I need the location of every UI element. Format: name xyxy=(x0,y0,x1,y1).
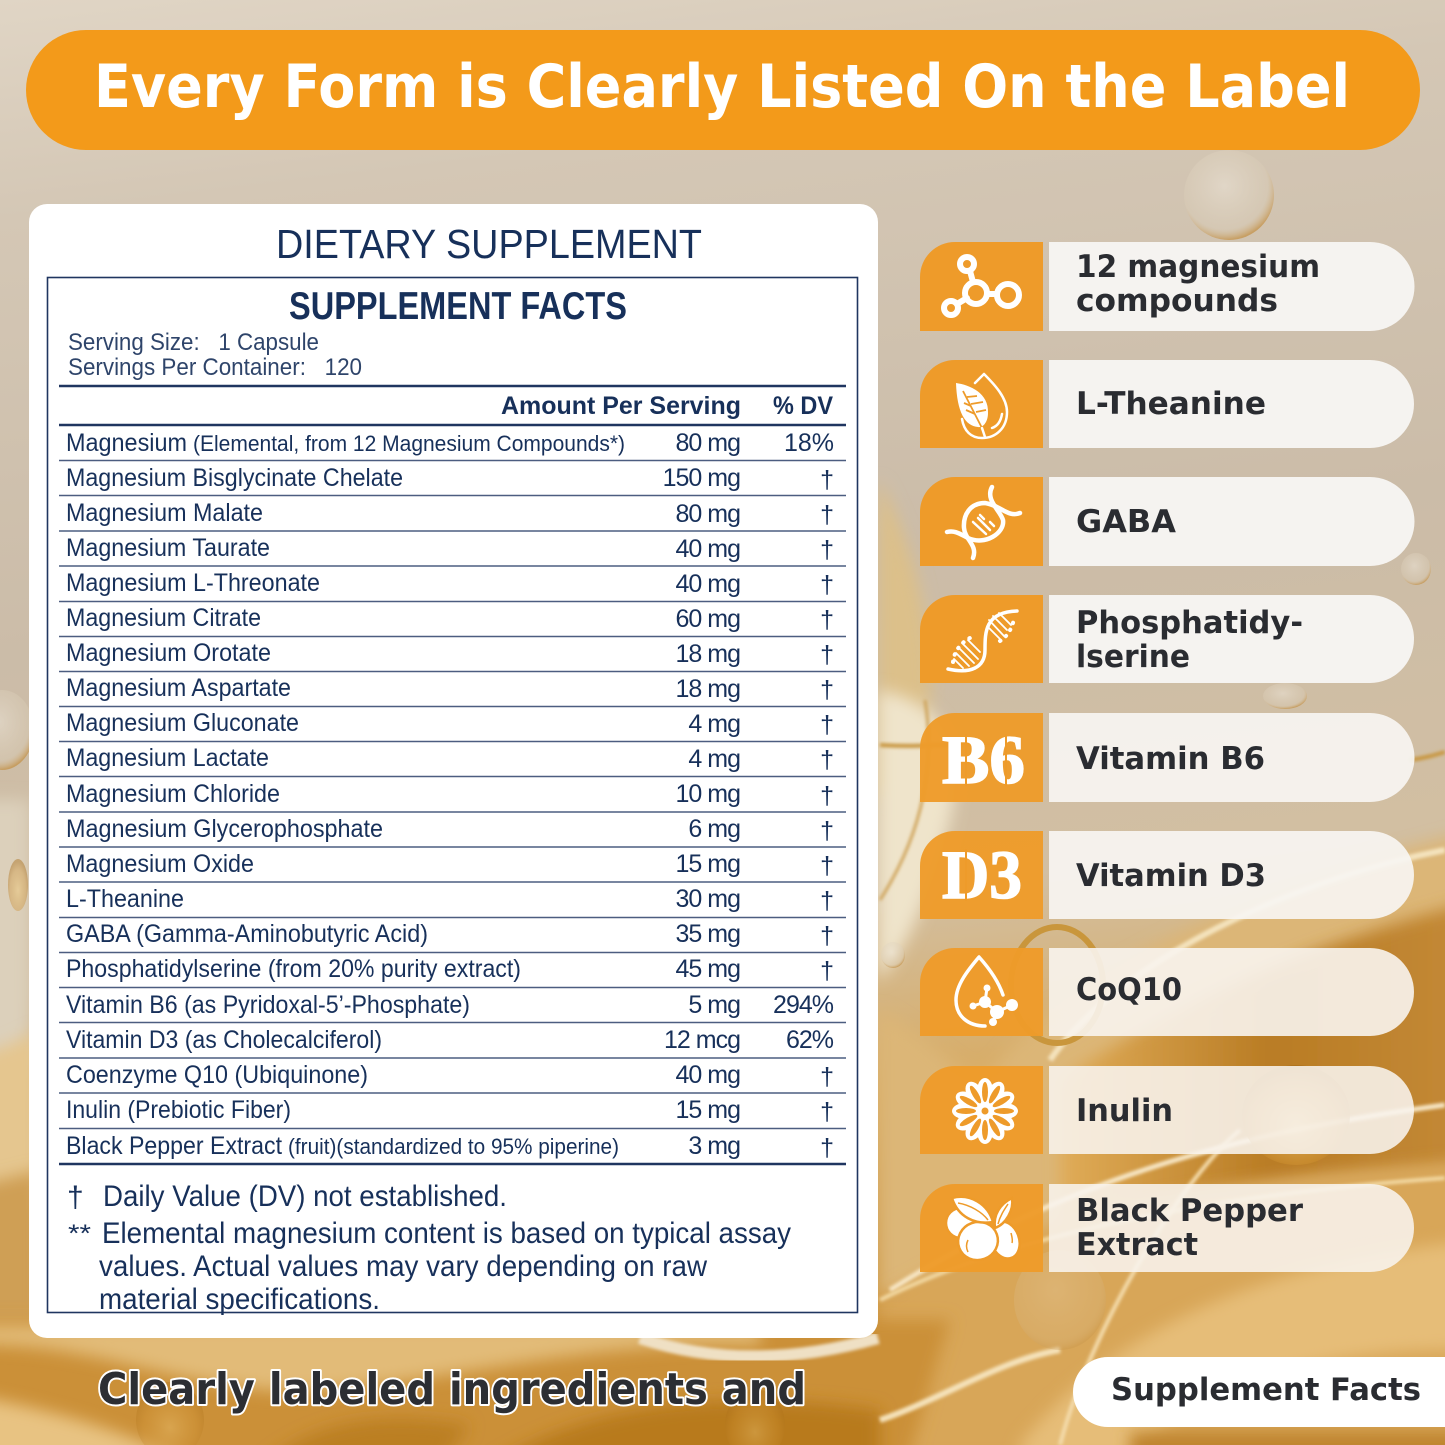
icon: pepper berries xyxy=(946,1197,1025,1266)
panel: supplement label card xyxy=(29,204,878,1338)
ingredient table rows: Coenzyme Q10 (Ubiquinone) xyxy=(66,1061,368,1089)
ingredient table rows: 30 mg xyxy=(676,885,740,913)
ingredient table rows: 294% xyxy=(773,991,834,1019)
ingredient table rows: 40 mg xyxy=(676,1061,740,1089)
item: 12 magnesium compounds: compounds xyxy=(1076,283,1278,319)
footnotes: Elemental magnesium content is based on typical assay xyxy=(102,1217,791,1250)
ingredient table rows: † xyxy=(820,466,834,494)
footnotes: Daily Value (DV) not established. xyxy=(103,1180,507,1213)
ingredient table rows: 15 mg xyxy=(676,850,740,878)
ingredient table rows: Magnesium xyxy=(66,429,187,457)
ingredient table rows: † xyxy=(820,1063,834,1091)
ingredient table rows: † xyxy=(820,1098,834,1126)
ingredient table rows: Magnesium L-Threonate xyxy=(66,569,320,597)
ingredient table rows: 60 mg xyxy=(676,605,740,633)
item: 12 magnesium compounds: 12 magnesium xyxy=(1076,249,1320,285)
ingredient table rows: Magnesium Oxide xyxy=(66,850,254,878)
ingredient table rows: Magnesium Aspartate xyxy=(66,674,291,702)
item: Inulin: Inulin xyxy=(1076,1093,1173,1129)
ingredient table rows: 18 mg xyxy=(676,675,740,703)
ingredient table rows: † xyxy=(820,746,834,774)
icon: flower xyxy=(952,1078,1018,1144)
ingredient table rows: (fruit)(standardized to 95% piperine) xyxy=(288,1134,619,1159)
ingredient table rows: L-Theanine xyxy=(66,885,184,913)
ingredient table rows: Magnesium Taurate xyxy=(66,534,270,562)
ingredient table rows: † xyxy=(820,571,834,599)
table header: % DV xyxy=(773,392,833,420)
item: Phosphatidylserine xyxy=(920,595,1414,683)
ingredient table rows: Magnesium Lactate xyxy=(66,744,269,772)
footnotes: material specifications. xyxy=(99,1283,380,1316)
icon: DNA cross xyxy=(947,487,1020,558)
item: Black Pepper Extract: Black Pepper xyxy=(1076,1193,1304,1229)
item: Phosphatidylserine: Phosphatidy- xyxy=(1076,605,1303,641)
ingredient table rows: 80 mg xyxy=(676,429,740,457)
footnotes xyxy=(67,1180,791,1316)
ingredient table rows: Phosphatidylserine (from 20% purity extract) xyxy=(66,955,521,983)
ingredient table rows: 4 mg xyxy=(688,710,740,738)
ingredient table rows: † xyxy=(820,606,834,634)
icon: DNA helix xyxy=(948,611,1017,671)
ingredient table rows: 18% xyxy=(784,429,834,457)
facts box border xyxy=(48,278,858,1312)
ingredient table rows: Magnesium Glycerophosphate xyxy=(66,815,383,843)
ingredient table rows: Magnesium Chloride xyxy=(66,780,280,808)
ingredient table rows: 45 mg xyxy=(676,955,740,983)
icon: B6 stencil: B6 xyxy=(942,722,1025,798)
bottom waves xyxy=(0,1320,950,1445)
ingredient table rows: 15 mg xyxy=(676,1096,740,1124)
caption: clearly labeled ingredients: Clearly labeled ingredients and xyxy=(98,1364,806,1415)
icon: drop with molecule xyxy=(956,957,1018,1026)
serving information: Serving Size: 1 Capsule xyxy=(68,329,319,356)
ingredient table rows: † xyxy=(820,817,834,845)
item: Black Pepper Extract: Extract xyxy=(1076,1227,1198,1263)
ingredient table rows: † xyxy=(820,922,834,950)
ingredient table rows: Magnesium Bisglycinate Chelate xyxy=(66,464,403,492)
lens at right of card xyxy=(878,480,931,800)
ingredient table rows: † xyxy=(820,782,834,810)
left edge xyxy=(0,800,30,1090)
title banner xyxy=(26,30,1420,150)
ingredient table rows: † xyxy=(820,676,834,704)
footnotes: † xyxy=(67,1181,84,1214)
light streaks xyxy=(880,744,1445,760)
ingredient table rows: † xyxy=(820,1134,834,1162)
ingredient table rows: 35 mg xyxy=(676,920,740,948)
right sweeping gold xyxy=(878,830,1445,1300)
ingredient table rows: Magnesium Malate xyxy=(66,499,263,527)
ingredient table rows: 150 mg xyxy=(663,464,740,492)
ingredient table rows: Vitamin D3 (as Cholecalciferol) xyxy=(66,1026,382,1054)
ingredient table rows: GABA (Gamma-Aminobutyric Acid) xyxy=(66,920,428,948)
ingredient table rows: 5 mg xyxy=(688,991,740,1019)
item: 12 magnesium compounds xyxy=(920,242,1414,331)
item: L-Theanine xyxy=(920,360,1414,448)
item: Vitamin B6 xyxy=(920,713,1414,802)
bubbles xyxy=(1184,150,1274,240)
item: Inulin xyxy=(920,1066,1414,1154)
serving information: Servings Per Container: 120 xyxy=(68,354,362,381)
item: Black Pepper Extract xyxy=(920,1184,1414,1272)
item: GABA xyxy=(920,477,1414,566)
ingredient table rows: Magnesium Citrate xyxy=(66,604,261,632)
badge: supplement facts: Supplement Facts xyxy=(1111,1372,1421,1408)
ingredient table rows: 62% xyxy=(786,1026,834,1054)
ingredient table rows: † xyxy=(820,501,834,529)
icon: leaf in drop xyxy=(956,374,1007,438)
ingredient table rows: 12 mcg xyxy=(664,1026,740,1054)
ingredient table rows: 10 mg xyxy=(676,780,740,808)
ingredient table rows: † xyxy=(820,852,834,880)
ingredient table rows: † xyxy=(820,711,834,739)
ingredient table rows: Inulin (Prebiotic Fiber) xyxy=(66,1096,291,1124)
footnotes: values. Actual values may vary depending on raw xyxy=(99,1250,707,1283)
item: Vitamin B6: Vitamin B6 xyxy=(1076,741,1265,777)
serving information xyxy=(68,329,362,381)
item: GABA: GABA xyxy=(1076,504,1176,540)
ingredient table rows: Magnesium Gluconate xyxy=(66,709,299,737)
ingredient table rows: 6 mg xyxy=(688,815,740,843)
heading: dietary supplement: DIETARY SUPPLEMENT xyxy=(276,221,702,267)
item: L-Theanine: L-Theanine xyxy=(1076,386,1266,422)
item: Phosphatidylserine: lserine xyxy=(1076,639,1190,675)
item: Vitamin D3 xyxy=(920,831,1414,919)
item: CoQ10 xyxy=(920,948,1414,1036)
icon: molecule xyxy=(944,257,1019,315)
ingredient table rows: Vitamin B6 (as Pyridoxal-5’-Phosphate) xyxy=(66,991,470,1019)
ingredient table rows: 4 mg xyxy=(688,745,740,773)
ingredient table rows: 18 mg xyxy=(676,640,740,668)
ingredient table rows: † xyxy=(820,641,834,669)
ingredient table rows: (Elemental, from 12 Magnesium Compounds*) xyxy=(193,431,625,456)
item: Vitamin D3: Vitamin D3 xyxy=(1076,858,1266,894)
table header: Amount Per Serving xyxy=(501,392,741,420)
footnotes: ** xyxy=(68,1220,91,1248)
ingredient table rows: † xyxy=(820,536,834,564)
icon: D3 stencil: D3 xyxy=(942,837,1022,913)
ingredient table rows: 40 mg xyxy=(676,535,740,563)
ingredient table rows: 3 mg xyxy=(688,1132,740,1160)
ingredient table rows: Magnesium Orotate xyxy=(66,639,271,667)
ingredient table rows: Black Pepper Extract xyxy=(66,1132,282,1160)
heading: supplement facts: SUPPLEMENT FACTS xyxy=(289,285,627,328)
item: CoQ10: CoQ10 xyxy=(1076,972,1182,1008)
ingredient table rows: 40 mg xyxy=(676,570,740,598)
ingredient table rows: 80 mg xyxy=(676,500,740,528)
ingredient table rows: † xyxy=(820,887,834,915)
badge: supplement facts xyxy=(1073,1357,1445,1427)
ingredient table rows xyxy=(66,429,834,1162)
ingredient table rows: † xyxy=(820,957,834,985)
